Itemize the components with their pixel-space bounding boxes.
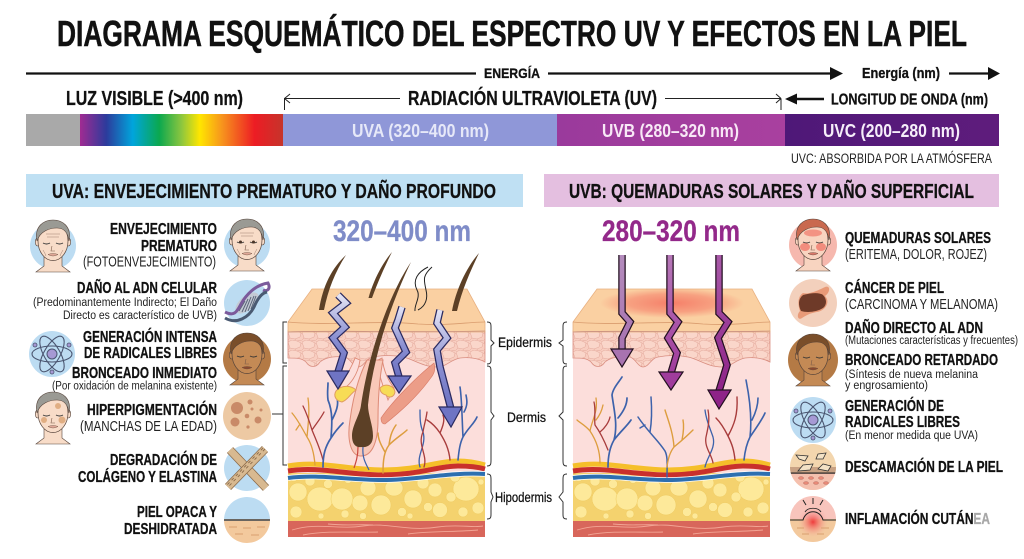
- text: hyperpigmentation: (MANCHAS DE LA EDAD): [80, 418, 217, 435]
- text: DNA damage: (Predominantemente Indirecto; El Daño: [33, 297, 217, 309]
- text: premature ageing: (FOTOENVEJECIMIENTO): [83, 254, 216, 270]
- text: DNA damage: [33, 279, 217, 322]
- text: inflammation: INFLAMACIÓN CUTÁNEA: [845, 510, 990, 528]
- sunburn redness: [600, 288, 744, 318]
- energy axis arrow: [26, 65, 843, 81]
- labels: skin layers: Dermis: [507, 410, 546, 425]
- icon: collagen fibres: [224, 445, 270, 491]
- text: direct DNA damage: DAÑO DIRECTO AL ADN: [845, 319, 983, 337]
- wavelength label UVB: 280–320 nm: [602, 215, 740, 248]
- icon: aged face closed eyes: [30, 220, 76, 272]
- text: premature ageing: [83, 221, 217, 270]
- labels: skin layers: Epidermis: [498, 335, 552, 350]
- text: delayed tanning: (Síntesis de nueva melanina: [845, 369, 979, 381]
- UVB arrow 2: [659, 255, 683, 390]
- blood vessels: [577, 377, 765, 477]
- text: DNA damage: Directo es característico de UVB): [63, 310, 217, 322]
- panel: UVA effects list: [29, 219, 271, 543]
- icon: melanoma: [789, 279, 837, 327]
- icon: dry skin: [224, 497, 270, 543]
- UVA arrow 1: [327, 295, 349, 389]
- hair follicle: [349, 360, 383, 456]
- text: dull skin: DESHIDRATADA: [124, 521, 217, 538]
- skin layers: [573, 289, 770, 537]
- label: visible light: LUZ VISIBLE (>400 nm): [66, 87, 243, 110]
- text: skin cancer: [845, 280, 998, 313]
- text: skin cancer: CÁNCER DE PIEL: [845, 280, 944, 297]
- text: free radicals: [845, 397, 978, 442]
- spectrum bar: UVA (320–400 nm): [352, 120, 489, 141]
- text: free radicals: DE RADICALES LIBRES: [84, 345, 217, 362]
- text: direct DNA damage: [845, 319, 1018, 347]
- icon: tanned face: [788, 334, 838, 386]
- label: wavelength: [785, 92, 988, 108]
- text: free radicals: [83, 328, 217, 362]
- text: free radicals: GENERACIÓN DE: [845, 397, 944, 415]
- text: free radicals: (En menor medida que UVA): [845, 430, 978, 442]
- text: immediate tanning: BRONCEADO INMEDIATO: [72, 365, 217, 382]
- UVA arrow 2: [388, 307, 411, 393]
- wavy hairs: [415, 267, 432, 311]
- text: immediate tanning: [52, 365, 217, 392]
- text: hyperpigmentation: [80, 401, 217, 435]
- icon: face with age spots: [35, 392, 71, 444]
- text: free radicals: RADICALES LIBRES: [845, 414, 960, 431]
- label: UV radiation range: [284, 86, 781, 110]
- UVB arrow 3: [708, 255, 731, 409]
- label: UV radiation range: RADIACIÓN ULTRAVIOLETA (UV): [408, 86, 657, 110]
- blood vessels: [292, 383, 477, 473]
- UVA arrow 3: [437, 310, 462, 427]
- sebaceous ducts: [336, 358, 394, 400]
- erector muscle: [381, 363, 435, 424]
- icon: aged face open eyes: [224, 219, 270, 271]
- text: delayed tanning: y engrosamiento): [845, 380, 928, 392]
- text: DNA damage: DAÑO AL ADN CELULAR: [77, 279, 217, 297]
- text: premature ageing: PREMATURO: [141, 238, 217, 255]
- skin layers: [288, 289, 485, 537]
- labels: skin layers: Hipodermis: [495, 490, 552, 505]
- sebaceous glands: [335, 385, 395, 402]
- text: free radicals: GENERACIÓN INTENSA: [83, 328, 217, 346]
- text: dull skin: [124, 504, 217, 538]
- panel: UVB effects list: [788, 219, 1018, 542]
- spectrum bar: UVC (200–280 nm): [823, 120, 960, 141]
- icon: tanned face: [223, 333, 271, 385]
- energy nm arrow: Energía (nm): [862, 66, 940, 82]
- text: immediate tanning: (Por oxidación de melanina existente): [52, 380, 217, 392]
- labels: skin layers: [487, 322, 567, 519]
- text: delayed tanning: [845, 352, 998, 392]
- energy nm arrow: [862, 66, 1000, 82]
- chart: UVB skin cross-section: [573, 215, 770, 537]
- icon: DNA helix: [224, 280, 270, 326]
- text: collagen: [78, 451, 217, 486]
- text: collagen: DEGRADACIÓN DE: [110, 451, 217, 469]
- icon: inflamed skin: [790, 496, 836, 542]
- icon: peeling skin: [790, 444, 836, 490]
- UVB arrow 1: [611, 255, 633, 367]
- spectrum bar: [26, 114, 999, 146]
- icon: atom: [29, 331, 75, 377]
- brackets left: [272, 322, 287, 465]
- icon: sunburned face: [789, 219, 837, 271]
- text: dull skin: PIEL OPACA Y: [137, 504, 217, 521]
- energy axis arrow: ENERGÍA: [484, 65, 540, 81]
- spectrum bar: UVB (280–320 nm): [602, 120, 739, 141]
- text: hyperpigmentation: HIPERPIGMENTACIÓN: [87, 401, 217, 419]
- heading: UVA: [26, 174, 523, 207]
- icon: skin spots: [223, 392, 271, 440]
- chart: UVA skin cross-section: [272, 215, 485, 537]
- icon: atom: [790, 397, 836, 443]
- text: collagen: COLÁGENO Y ELASTINA: [78, 469, 217, 486]
- text: sunburn: [845, 230, 991, 263]
- heading: UVA: UVA: ENVEJECIMIENTO PREMATURO Y DAÑO PROFUNDO: [52, 180, 496, 203]
- wavelength label UVA: 320–400 nm: [333, 215, 471, 248]
- hairs: [319, 252, 479, 447]
- text: premature ageing: ENVEJECIMIENTO: [110, 221, 217, 238]
- heading: UVB: [544, 174, 999, 207]
